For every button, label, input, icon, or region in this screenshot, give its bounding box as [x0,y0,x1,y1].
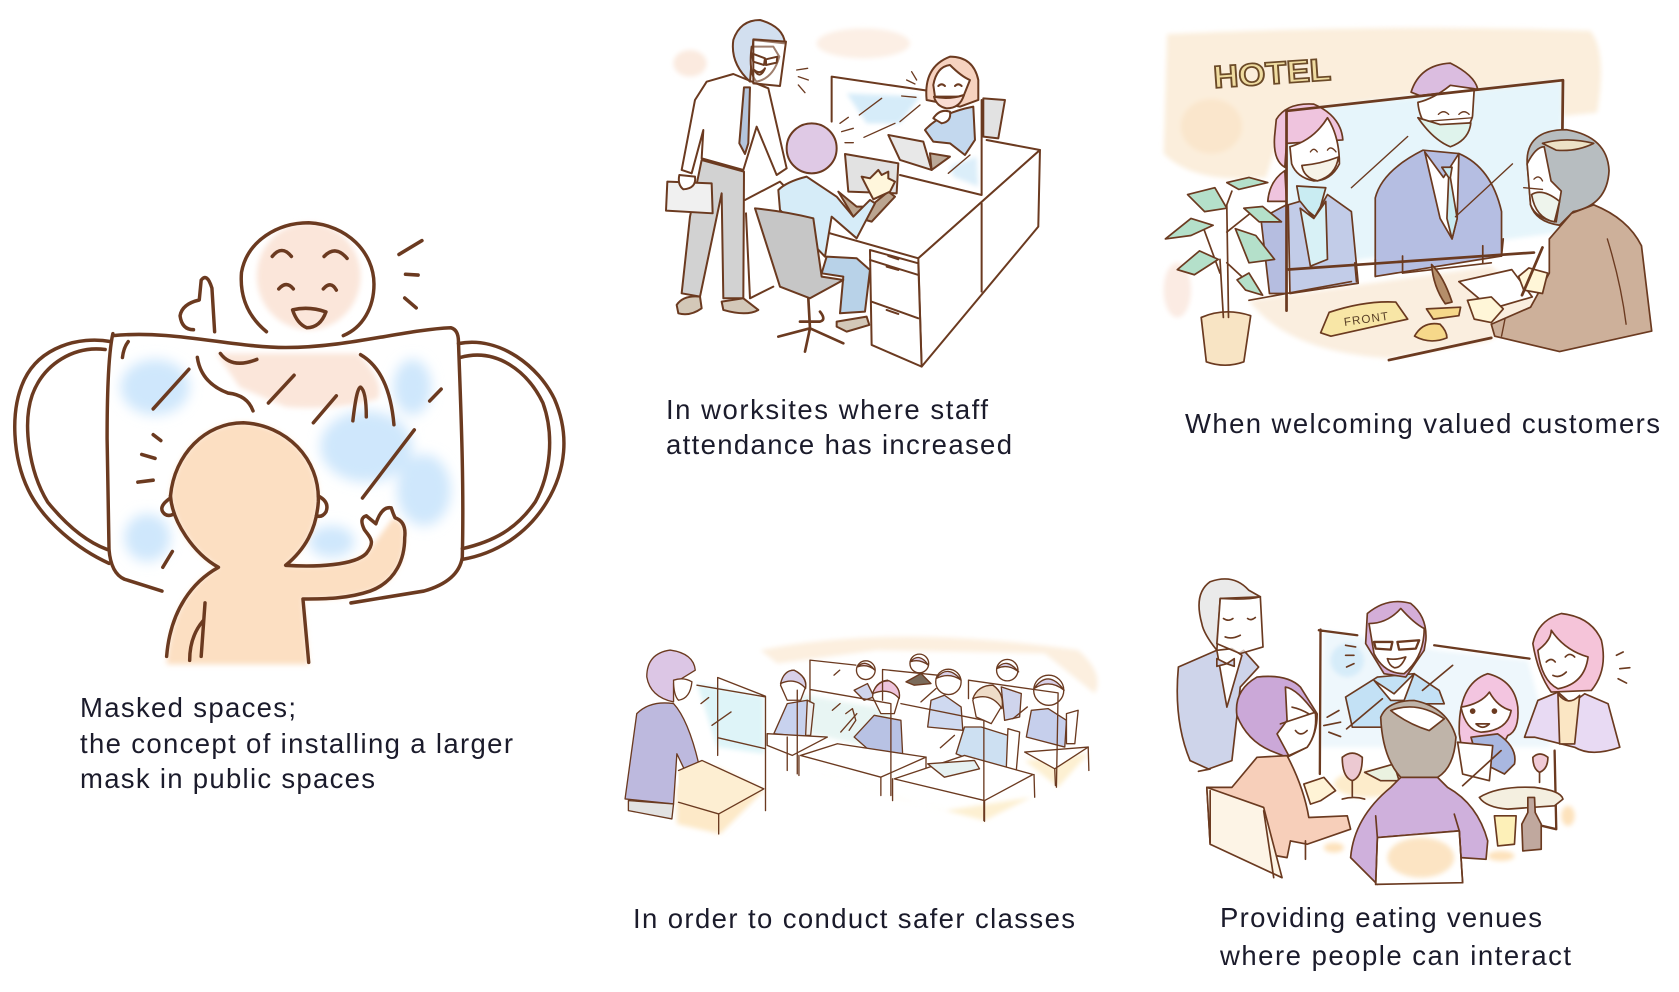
panel: worksites [666,20,1040,460]
caption: masked spaces: Masked spaces; [80,692,296,723]
caption: masked spaces: the concept of installing a larger [80,728,513,759]
illustration: dining table with partition [1177,579,1630,884]
caption: valued customers: When welcoming valued customers [1185,408,1660,439]
panel: valued customers [1164,28,1660,439]
caption: safer classes: In order to conduct safer classes [633,903,1075,934]
caption: eating venues: where people can interact [1219,940,1571,971]
caption: worksites: attendance has increased [666,429,1012,460]
illustration: hotel front desk [1164,28,1652,365]
panel: masked spaces [15,223,564,794]
panel: safer classes [625,637,1098,934]
illustration: office desk with partition [666,20,1040,367]
caption: eating venues: Providing eating venues [1220,902,1542,933]
illustration: classroom with desk partitions [625,637,1098,834]
caption: masked spaces: mask in public spaces [80,763,375,794]
illustration: giant mask with two people [15,223,564,664]
sign: FRONT: FRONT [1343,310,1389,329]
caption: worksites: In worksites where staff [666,394,988,425]
panel: eating venues [1177,579,1630,971]
sign: HOTEL: HOTEL [1212,52,1332,95]
